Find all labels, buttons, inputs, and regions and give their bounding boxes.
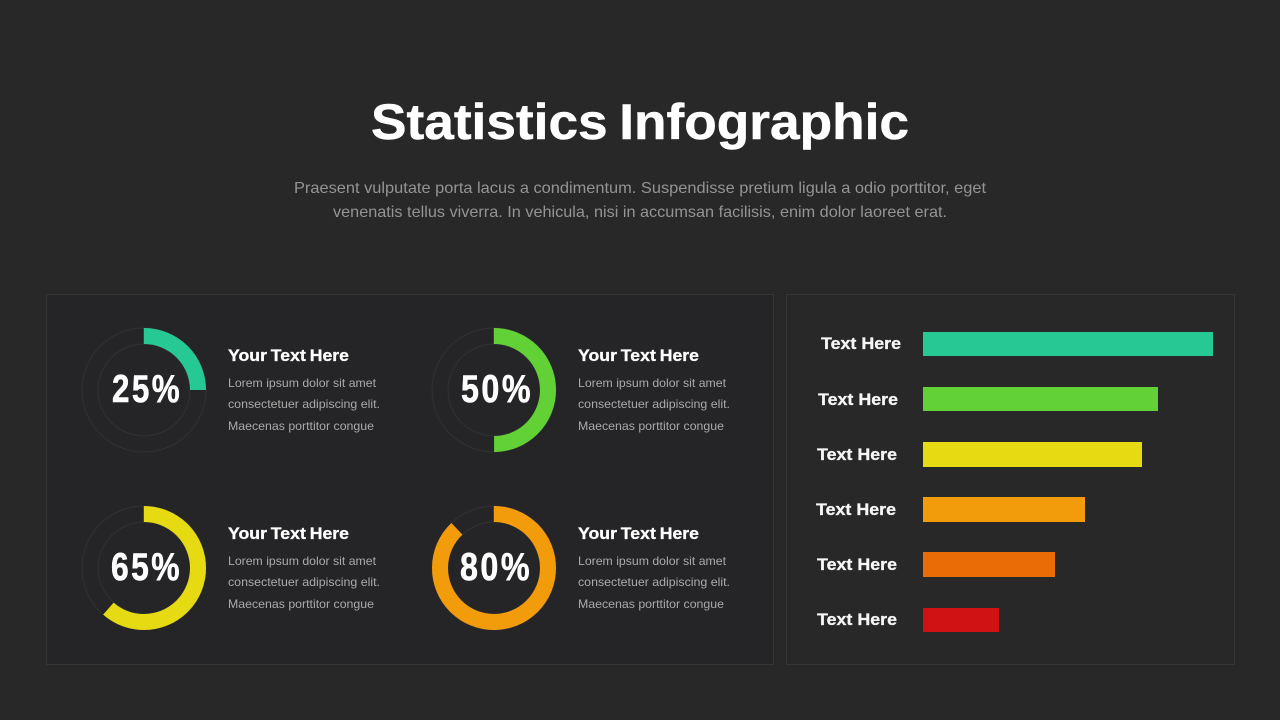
text block: 25% [228, 346, 380, 433]
text block: 65%: consectetuer adipiscing elit. [228, 575, 380, 589]
donut: 65%: 65% [111, 546, 182, 589]
text block: 80%: Your Text Here [578, 524, 699, 543]
text block: 80%: Maecenas porttitor congue [578, 597, 724, 611]
bar row 6: Text Here [817, 610, 897, 629]
text block: 65% [228, 524, 380, 611]
text block: 25%: Your Text Here [228, 346, 349, 365]
text block: 80% [578, 524, 730, 611]
text block: 65%: Your Text Here [228, 524, 349, 543]
text block: 80%: Lorem ipsum dolor sit amet [578, 554, 727, 568]
stat: 50% [432, 328, 730, 452]
bar row 6 [817, 608, 999, 632]
bar row 1: Text Here [821, 334, 901, 353]
bar row 1 [821, 332, 1213, 356]
title: Statistics Infographic [371, 94, 909, 150]
donut: 80%: 80% [460, 546, 532, 589]
bar row 2 [818, 387, 1158, 411]
text block: 50%: Lorem ipsum dolor sit amet [578, 376, 727, 390]
bar row 4 [816, 497, 1085, 522]
stat: 25% [82, 328, 380, 452]
donut: 65% [82, 506, 206, 630]
panel: donut statistics [46, 294, 774, 664]
donut: 50% [432, 328, 556, 452]
text block: 50% [578, 346, 730, 433]
text block: 50%: Your Text Here [578, 346, 699, 365]
text block: 25%: Lorem ipsum dolor sit amet [228, 376, 377, 390]
panel: bar chart [786, 294, 1234, 664]
donut: 50%: 50% [461, 368, 533, 411]
bar row 4: Text Here [816, 500, 896, 519]
text block: 50%: Maecenas porttitor congue [578, 419, 724, 433]
subtitle text block [294, 180, 987, 221]
text block: 65%: Maecenas porttitor congue [228, 597, 374, 611]
text block: 80%: consectetuer adipiscing elit. [578, 575, 730, 589]
bar row 5: Text Here [817, 555, 897, 574]
subtitle text block: Praesent vulputate porta lacus a condimentum. Suspendisse pretium ligula a odio porttitor, eget [294, 180, 987, 197]
text block: 65%: Lorem ipsum dolor sit amet [228, 554, 377, 568]
bar row 3: Text Here [817, 445, 897, 464]
subtitle text block: venenatis tellus viverra. In vehicula, nisi in accumsan facilisis, enim dolor laoreet erat. [333, 204, 947, 221]
stat: 65% [82, 506, 380, 630]
text block: 25%: consectetuer adipiscing elit. [228, 397, 380, 411]
donut: 80% [432, 506, 556, 630]
text block: 25%: Maecenas porttitor congue [228, 419, 374, 433]
donut: 25% [82, 328, 206, 452]
text block: 50%: consectetuer adipiscing elit. [578, 397, 730, 411]
bar row 2: Text Here [818, 390, 898, 409]
stat: 80% [432, 506, 730, 630]
bar row 3 [817, 442, 1142, 467]
donut: 25%: 25% [112, 368, 182, 411]
bar row 5 [817, 552, 1055, 577]
